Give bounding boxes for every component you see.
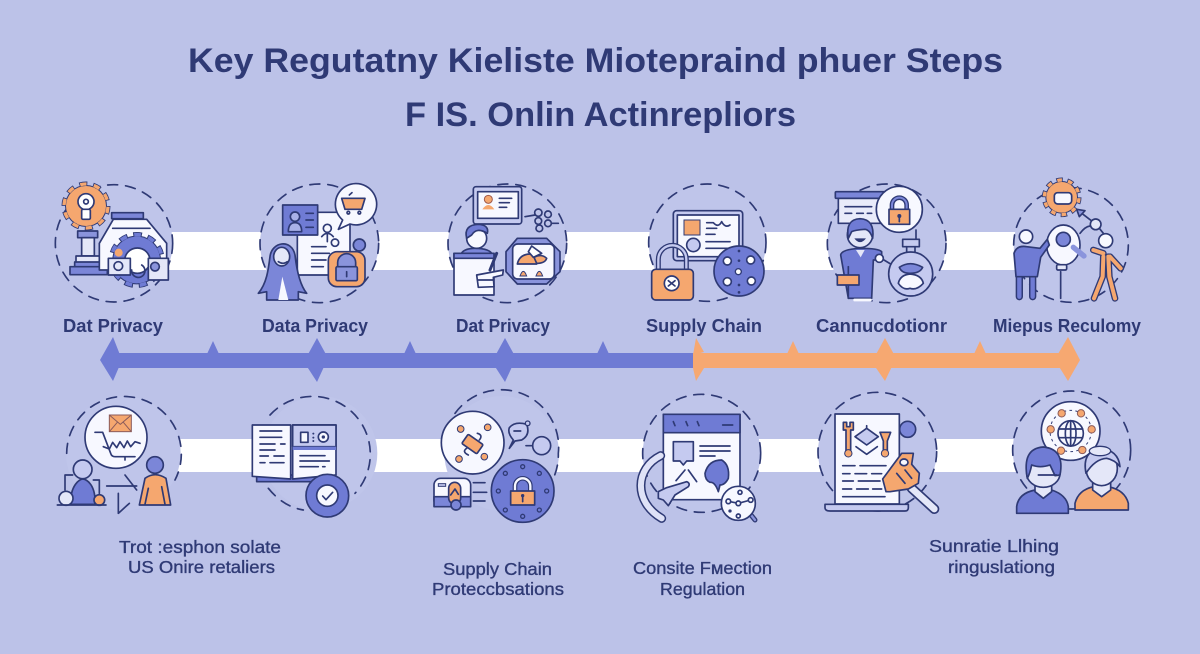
icon: left person with nodes	[57, 460, 106, 505]
icon: browser window	[663, 414, 740, 500]
icon: orange gear	[1044, 180, 1079, 215]
icon: left person	[1017, 447, 1068, 513]
caption: bottom 1: Trot :esphon solate	[119, 537, 281, 557]
icon: blue gear with cards	[108, 235, 168, 285]
title	[188, 42, 1003, 134]
icon: food badge	[506, 238, 560, 284]
icon: white circle with link	[441, 411, 504, 474]
icon: profile bubble	[473, 187, 522, 224]
icon: flask with animal	[884, 230, 933, 296]
icon: truck	[434, 478, 487, 510]
icon: blue disc	[714, 246, 764, 296]
label: top 2: Data Privacy	[262, 315, 369, 336]
icon: network nodes	[525, 209, 558, 232]
caption: bottom 3: Supply Chain	[443, 559, 552, 579]
icon: padlock bubble	[876, 186, 922, 232]
white connector band, bottom row	[170, 439, 1020, 472]
panel: bottom 4	[641, 394, 761, 520]
white connector band, top row	[160, 232, 1020, 270]
icon: curved arm and hand	[641, 456, 689, 518]
icon: blue person	[1014, 230, 1049, 297]
icon: open book	[252, 425, 336, 482]
label: top 6: Miepus Reculomy	[993, 315, 1142, 336]
panel: top 6	[1014, 180, 1128, 302]
icon: orange gear with light bulb	[64, 184, 108, 228]
icon: orange padlock	[652, 245, 693, 300]
blue timeline segment	[100, 337, 695, 382]
caption: bottom 5	[929, 536, 1059, 577]
caption: bottom 3: Protecсbsations	[432, 579, 564, 599]
timeline double arrow	[100, 337, 1080, 382]
icon: speech bubbles	[509, 421, 551, 455]
caption: bottom 5: Sunratie Llhing	[929, 536, 1059, 556]
label: top 3: Dat Privacy	[456, 315, 551, 336]
icon: small blue disc	[900, 421, 916, 437]
icon: person with notepad	[454, 224, 503, 295]
panel: bottom 3	[434, 390, 559, 522]
icon: ID card	[283, 205, 318, 235]
icon: padlock tile	[328, 252, 365, 287]
panel: bottom 2	[252, 396, 377, 517]
icon: magnifier with graph	[721, 486, 755, 520]
icon: hand holding magnifier	[883, 453, 934, 509]
icon: lightbulb idea	[1047, 225, 1084, 298]
icon: blue padlock disc	[491, 460, 554, 522]
icon: right person	[139, 457, 171, 505]
panel: top 3 data privacy	[448, 184, 567, 303]
panel: top 2 data privacy	[258, 184, 379, 303]
icon: monitor card	[673, 211, 743, 261]
caption: bottom 4: Regulation	[660, 579, 745, 599]
caption: bottom 1: US Onire retaliers	[128, 557, 275, 577]
arrows between people	[107, 475, 137, 513]
title: F IS. Onlin Actinrepliors	[405, 96, 796, 134]
panel: top 1 data privacy	[55, 184, 173, 302]
caption: bottom 4: Consite Fмection	[633, 558, 772, 578]
caption: bottom 4	[633, 558, 772, 599]
icon: small blue dot	[353, 239, 365, 251]
icon: pedestal	[70, 231, 107, 275]
icon: orange person	[1093, 234, 1121, 298]
icon: right person	[1075, 446, 1128, 510]
icon: connector nodes	[1077, 209, 1103, 233]
orange timeline segment	[693, 337, 1080, 381]
label: top 5: Canпucdotionr	[816, 315, 947, 336]
label: top 4: Supply Chain	[646, 315, 762, 336]
icon: speech bubble with cart	[335, 184, 377, 229]
icon: check badge	[306, 474, 349, 517]
panel: bottom 1	[57, 396, 181, 513]
icon: smiling man	[837, 219, 883, 301]
icon: document behind gear	[99, 213, 167, 270]
title: Key Regutatny Kieliste Miotepraind phuer Steps	[188, 42, 1003, 80]
caption: bottom 3	[432, 559, 564, 599]
panel: bottom 5	[818, 392, 937, 511]
icon: presentation board	[835, 192, 885, 223]
caption: bottom 1	[119, 537, 281, 577]
panel: top 4 supply chain	[649, 184, 766, 301]
icon: document with tools	[825, 414, 908, 511]
icon: document	[297, 212, 350, 275]
icon: chart bubble	[85, 406, 147, 468]
label: top 1: Dat Privacy	[63, 315, 164, 336]
icon: woman with long hair	[258, 244, 307, 300]
caption: bottom 5: ringuslationg	[948, 557, 1055, 577]
panel: top 5	[827, 184, 946, 303]
icon: globe with nodes	[1041, 402, 1100, 460]
panel: bottom 6	[1013, 391, 1131, 513]
